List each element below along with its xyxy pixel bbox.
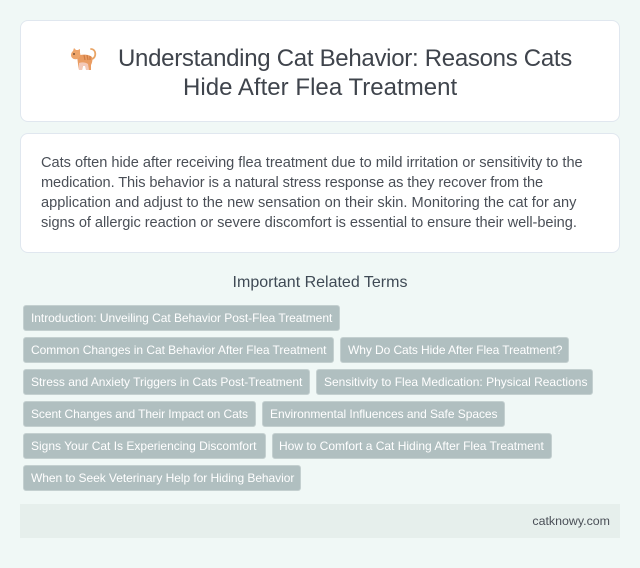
tag [23, 305, 340, 331]
paragraph text: Cats often hide after receiving flea treatment due to mild irritation or sensitivity to the [41, 155, 583, 171]
footer source text: catknowy.com [532, 514, 610, 528]
tag: Environmental Influences and Safe Spaces [270, 407, 497, 421]
paragraph text [41, 155, 583, 231]
heading line one: Understanding Cat Behavior: Reasons Cats [118, 45, 572, 72]
tag [23, 465, 301, 491]
tag: How to Comfort a Cat Hiding After Flea Treatment [279, 439, 544, 453]
section heading: related terms: Important Related Terms [233, 274, 407, 291]
tag [316, 369, 593, 395]
tag [23, 401, 256, 427]
tag: Sensitivity to Flea Medication: Physical Reactions [324, 375, 587, 389]
tag [23, 337, 334, 363]
paragraph text: application and adjust to the new sensation on their skin. Monitoring the cat for any [41, 195, 576, 211]
footer bar [20, 504, 620, 538]
tag: When to Seek Veterinary Help for Hiding Behavior [31, 471, 294, 485]
heading line two: Hide After Flea Treatment [183, 74, 457, 101]
tag [23, 369, 310, 395]
tag: Common Changes in Cat Behavior After Flea Treatment [31, 343, 326, 357]
tag: Signs Your Cat Is Experiencing Discomfort [31, 439, 256, 453]
tag: Introduction: Unveiling Cat Behavior Post-Flea Treatment [31, 311, 332, 325]
tag [23, 433, 266, 459]
paragraph text: medication. This behavior is a natural stress response as they recover from the [41, 175, 543, 191]
icon: cat [71, 48, 96, 70]
tag [272, 433, 552, 459]
tag: Why Do Cats Hide After Flea Treatment? [348, 343, 562, 357]
tag [340, 337, 569, 363]
panel: title card [20, 20, 620, 122]
tag: Stress and Anxiety Triggers in Cats Post-Treatment [31, 375, 302, 389]
tag list [23, 305, 593, 491]
paragraph text: signs of allergic reaction or severe discomfort is essential to ensure their well-being. [41, 215, 577, 231]
panel: intro paragraph [20, 133, 620, 253]
tag [262, 401, 505, 427]
tag: Scent Changes and Their Impact on Cats [31, 407, 248, 421]
